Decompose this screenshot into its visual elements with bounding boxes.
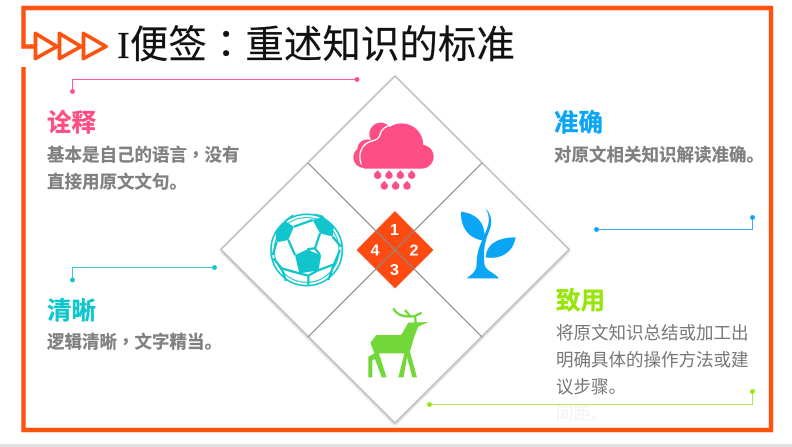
title: I便签：重述知识的标准 xyxy=(117,14,515,70)
icon: soccer ball xyxy=(271,214,342,286)
connector: blue xyxy=(596,217,752,230)
connector: pink xyxy=(72,80,357,91)
icon: deer xyxy=(368,308,429,377)
icon: triple arrow xyxy=(36,34,106,58)
connector: teal xyxy=(72,268,214,280)
panel: 清晰: 逻辑清晰，文字精当。 xyxy=(47,329,222,354)
center number diamond: 1 xyxy=(390,222,399,239)
panel: 诠释: 基本是自己的语言，没有 xyxy=(47,142,240,167)
panel: 致用: 将原文知识总结或加工出 xyxy=(556,323,748,343)
panel: 致用: 致用 xyxy=(556,287,605,315)
outer diamond xyxy=(221,76,569,423)
panel: 清晰 xyxy=(47,265,222,354)
center number diamond: 3 xyxy=(390,262,399,279)
panel: 致用: 间距。 xyxy=(556,404,608,424)
panel: 致用 xyxy=(427,287,755,424)
panel: 致用: 议步骤。 xyxy=(556,377,626,397)
panel: 清晰: 清晰 xyxy=(47,297,96,325)
center number diamond xyxy=(308,163,482,337)
bottom grey band xyxy=(0,444,792,447)
center number diamond: 4 xyxy=(371,242,380,260)
connector: green xyxy=(429,392,752,404)
icon: sprout xyxy=(461,208,516,278)
panel: 准确 xyxy=(554,109,764,232)
icon: rain cloud xyxy=(353,123,434,190)
panel: 诠释 xyxy=(47,77,359,192)
panel: 诠释: 诠释 xyxy=(47,109,96,137)
center number diamond: 2 xyxy=(410,242,419,260)
panel: 致用: 明确具体的操作方法或建 xyxy=(556,350,748,370)
panel: 准确: 对原文相关知识解读准确。 xyxy=(554,145,764,165)
panel: 准确: 准确 xyxy=(554,109,603,137)
diamond diagram xyxy=(221,76,569,423)
panel: 诠释: 直接用原文文句。 xyxy=(47,172,187,192)
